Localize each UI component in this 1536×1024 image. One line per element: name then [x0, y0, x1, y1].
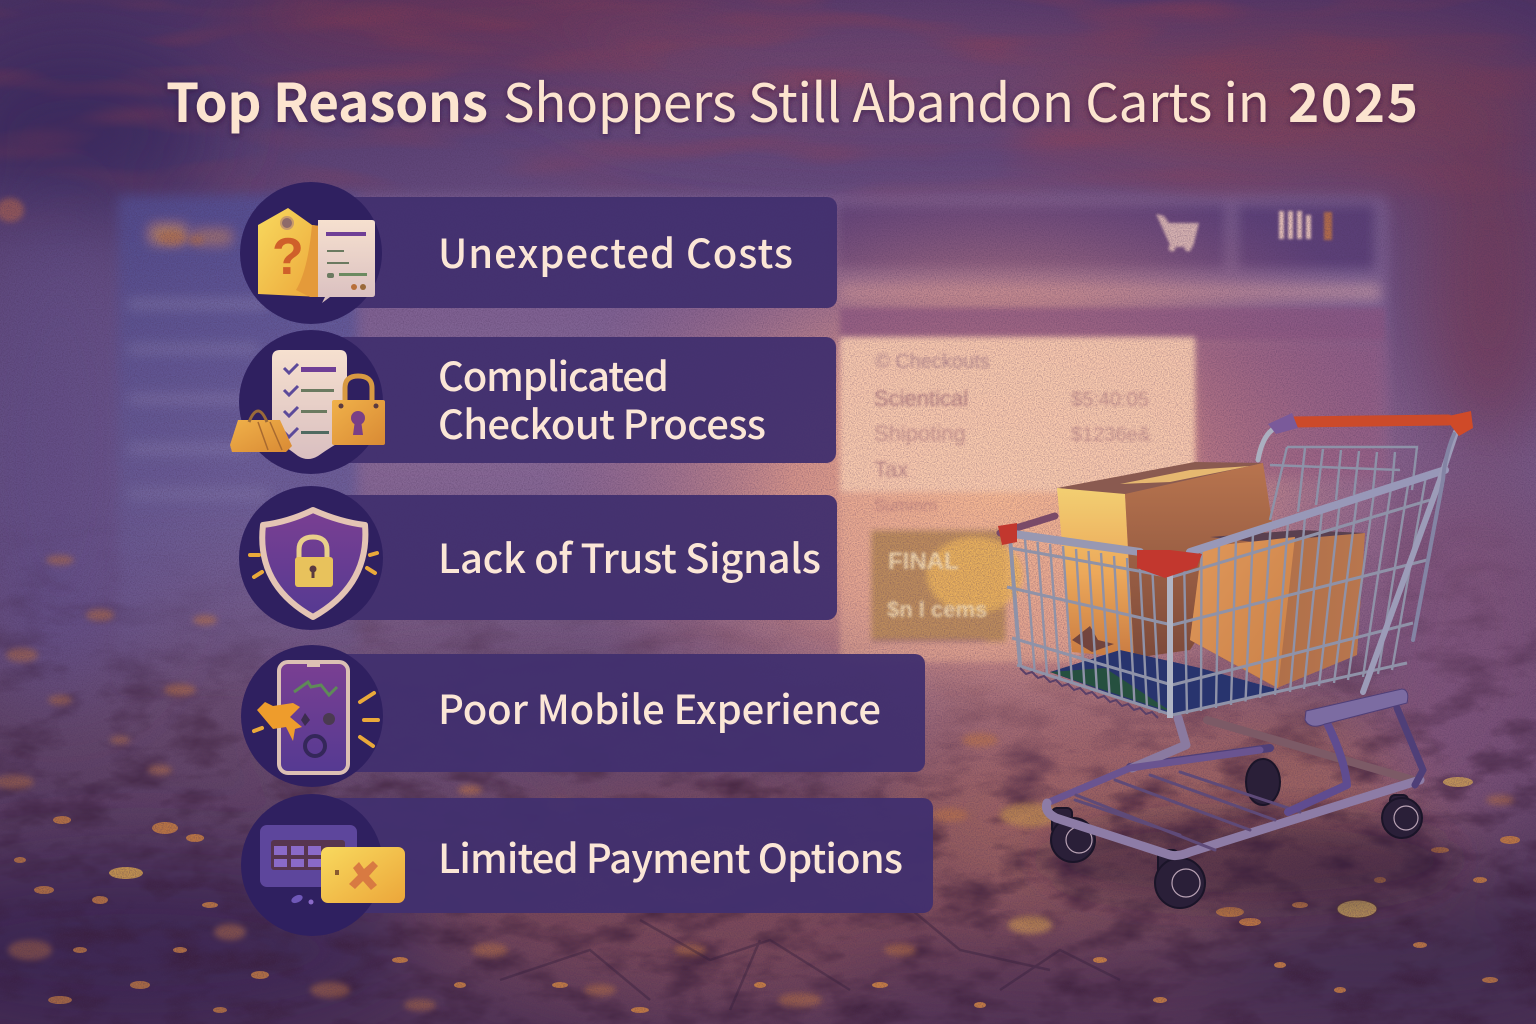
icon: shopping bags [230, 411, 292, 452]
cart wheels and base [1046, 708, 1423, 908]
cart front corner post [1167, 565, 1173, 718]
icon: credit card with keypad [260, 825, 357, 905]
cart handle end caps [1268, 413, 1298, 434]
icon: padlock [332, 376, 385, 445]
cart red corner guards [998, 523, 1202, 578]
blurred checkout header band [840, 308, 1385, 340]
cardboard box right [1190, 530, 1365, 688]
blurred label: Checkouts: © Checkouts [875, 351, 990, 373]
question mark glyph: ? [272, 228, 304, 286]
title: Top Reasons: Top Reasons [166, 62, 488, 138]
blurred label: final amount: $n l cems [887, 597, 987, 622]
row 2 bar [300, 337, 836, 463]
row 4 bar [300, 654, 925, 772]
blurred checkout receipt [840, 337, 1195, 662]
row 1: Unexpected Costs [240, 182, 837, 324]
blurred price 1: $5:40:05 [1071, 389, 1149, 411]
row 3 label: Lack of Trust Signals [438, 527, 821, 585]
row 2: Complicated Checkout Process [230, 330, 836, 474]
icon: phone alert rays [254, 693, 378, 746]
icon: itemised bill [318, 220, 375, 303]
row 4: Poor Mobile Experience [241, 645, 925, 787]
title: middle phrase: Shoppers Still Abandon Carts in [503, 62, 1270, 138]
blurred cart icon in top bar [1156, 214, 1199, 252]
cart right wire panel [1172, 476, 1430, 715]
cart shadow [1040, 815, 1460, 905]
cart floor liner [1050, 650, 1280, 716]
scattered coins on ground [0, 198, 1520, 1013]
cart lower bracket [1305, 689, 1408, 726]
title [166, 62, 1418, 138]
shopping cart illustration [998, 411, 1473, 908]
blurred label: Tax: Tax [874, 457, 908, 482]
cart handle right cap [1444, 411, 1473, 436]
row 3 icon circle [239, 486, 383, 630]
cart zigzag bottom edge [1020, 668, 1158, 718]
title: year: 2025 [1288, 62, 1418, 138]
row 4 icon circle [241, 645, 383, 787]
row 1 icon circle [240, 182, 382, 324]
warm glow behind checkout [540, 160, 1460, 820]
icon: checklist [272, 350, 347, 459]
row 2 icon circle [239, 330, 383, 474]
cart rear mesh panel [1270, 447, 1417, 520]
row 1 label: Unexpected Costs [438, 222, 793, 280]
blurred price 2: $1236e& [1071, 424, 1152, 446]
ground mottling texture [0, 576, 1536, 1024]
row 5: Limited Payment Options [241, 794, 933, 936]
blurred browser window backdrop [118, 196, 1388, 696]
cart left wire panel [1007, 537, 1172, 715]
icon: price tag with question mark [258, 208, 320, 297]
icon: alert sparks [250, 553, 377, 577]
cart top rim [1000, 470, 1445, 552]
cardboard box left [1057, 462, 1272, 658]
icon: shield with lock [262, 510, 365, 617]
row 3 bar [300, 495, 837, 620]
row 5 icon circle [241, 794, 383, 936]
blurred account glyphs in top bar [1279, 211, 1332, 240]
cart handle and frame [1258, 420, 1456, 692]
blurred label: Final: FINAL [888, 548, 959, 575]
icon: declined gold card [321, 847, 405, 903]
top reddish streaks [0, 0, 1536, 188]
row 2 label line 2: Checkout Process [438, 393, 766, 451]
row 1 bar [300, 197, 837, 308]
blurred side panel [1195, 338, 1385, 478]
blurred label: Shipping: Shipoting [874, 421, 966, 446]
row 5 bar [300, 798, 933, 913]
row 3: Lack of Trust Signals [239, 486, 837, 630]
blurred label: Scientical: Scientical [874, 386, 968, 411]
row 5 label: Limited Payment Options [438, 827, 903, 885]
blurred label: Summary: Summm [874, 496, 937, 515]
row 2 label line 1: Complicated [438, 345, 669, 403]
row 4 label: Poor Mobile Experience [438, 678, 881, 736]
icon: broken phone [257, 662, 348, 773]
